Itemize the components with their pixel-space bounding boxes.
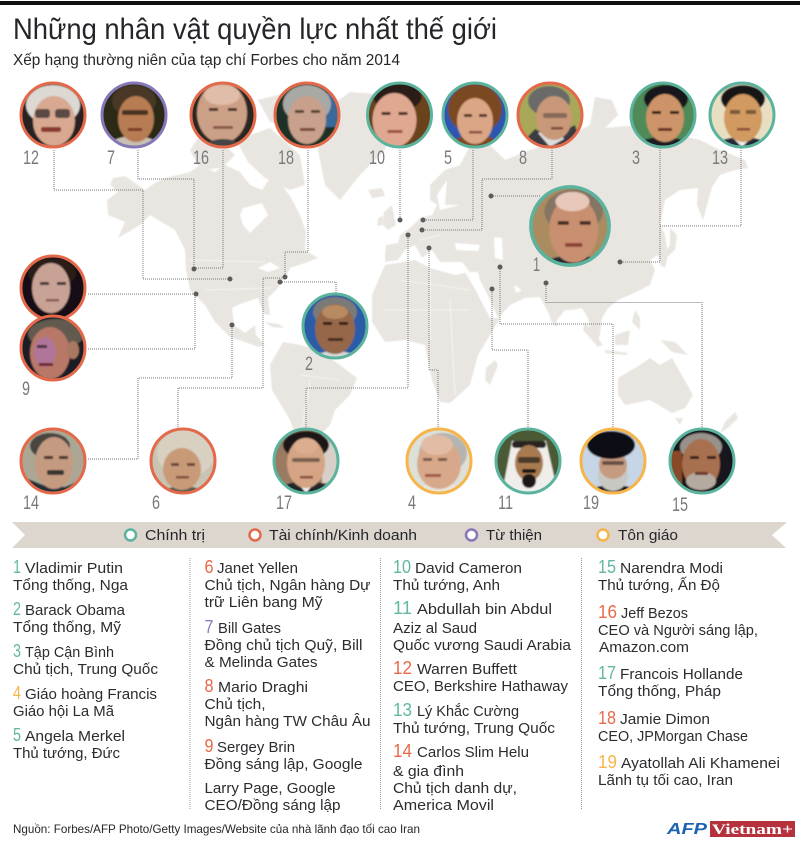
- rank numbers on map: 10: [369, 148, 385, 169]
- rank numbers on map: 5: [444, 148, 452, 169]
- list column 2: Đồng sáng lập, Google: [204, 756, 362, 773]
- list column 2: CEO/Đồng sáng lập: [204, 797, 340, 814]
- world map: [107, 92, 748, 480]
- list column 2: [204, 557, 370, 814]
- list column 3: [393, 557, 572, 814]
- list column 3: David Cameron: [415, 560, 522, 577]
- list column 3: Aziz al Saud: [393, 620, 477, 637]
- list column 1: Tổng thống, Nga: [13, 577, 129, 594]
- list column 3: Thủ tướng, Anh: [393, 577, 500, 594]
- list column 2: Đồng chủ tịch Quỹ, Bill: [204, 637, 362, 654]
- list column 4: Lãnh tụ tối cao, Iran: [598, 772, 733, 789]
- list column 3: 14: [393, 741, 412, 761]
- list column 3: Warren Buffett: [417, 661, 518, 678]
- list column 3: Quốc vương Saudi Arabia: [393, 637, 572, 654]
- portrait 9: Sergey Brin: [21, 256, 85, 320]
- list column 1: Tổng thống, Mỹ: [13, 619, 122, 636]
- portrait 12: Warren Buffett: [20, 82, 86, 148]
- list column 2: trữ Liên bang Mỹ: [204, 594, 323, 611]
- list column 3: 12: [393, 658, 412, 678]
- list column 4: Francois Hollande: [620, 666, 743, 683]
- list column 1: 4: [13, 683, 21, 703]
- list column 4: 15: [598, 557, 616, 577]
- portrait 2: Barack Obama: [303, 294, 367, 369]
- list column 2: Janet Yellen: [217, 560, 298, 577]
- list column 3: 11: [393, 598, 412, 618]
- source note: Nguồn: Forbes/AFP Photo/Getty Images/Website của nhà lãnh đạo tối cao Iran: [13, 822, 420, 836]
- portrait 7: Bill Gates: [102, 83, 166, 160]
- rank numbers on map: 13: [712, 148, 728, 169]
- list column 1: Vladimir Putin: [25, 560, 123, 577]
- portrait 19: Ali Khamenei: [581, 429, 645, 503]
- rank numbers on map: 3: [632, 148, 640, 169]
- portrait 3: Xi Jinping: [631, 83, 695, 159]
- list column 3: Thủ tướng, Trung Quốc: [393, 720, 556, 737]
- portrait 13: Li Keqiang: [710, 83, 774, 159]
- legend ribbon: Từ thiện: [486, 527, 542, 544]
- logo: AFP Vietnam+: Vietnam+: [712, 822, 793, 838]
- rank numbers on map: 12: [23, 148, 39, 169]
- list column 4: Amazon.com: [599, 639, 689, 656]
- rank numbers on map: 14: [23, 493, 39, 514]
- list column 1: 5: [13, 725, 21, 745]
- list column 1: 2: [13, 599, 21, 619]
- list column 1: Chủ tịch, Trung Quốc: [13, 661, 158, 678]
- list column 1: Giáo hoàng Francis: [25, 686, 157, 703]
- rank numbers on map: 9: [22, 379, 30, 400]
- column dividers: [190, 558, 582, 810]
- portrait 9: Larry Page: [21, 316, 85, 380]
- list column 2: 7: [204, 617, 214, 637]
- list column 1: Thủ tướng, Đức: [13, 745, 120, 762]
- list column 4: Thủ tướng, Ấn Độ: [598, 577, 720, 594]
- list column 4: Jeff Bezos: [621, 605, 688, 622]
- rank numbers on map: 18: [278, 148, 294, 169]
- rank numbers on map: 2: [305, 354, 313, 375]
- list column 4: Narendra Modi: [620, 560, 723, 577]
- list column 3: Carlos Slim Helu: [417, 744, 529, 761]
- portrait 18: Jamie Dimon: [275, 83, 339, 147]
- top bar: [0, 1, 800, 5]
- legend ribbon: Tôn giáo: [618, 527, 678, 544]
- list column 1: 1: [13, 557, 21, 577]
- portrait 17: Francois Hollande: [272, 428, 340, 494]
- rank numbers on map: 1: [533, 255, 540, 276]
- list column 1: Barack Obama: [25, 602, 126, 619]
- list column 2: Ngân hàng TW Châu Âu: [204, 713, 370, 730]
- list column 1: [13, 557, 158, 762]
- portrait 15: Narendra Modi: [670, 429, 734, 493]
- list column 2: 9: [204, 736, 214, 756]
- rank numbers on map: 7: [107, 148, 115, 169]
- list column 4: 18: [598, 708, 616, 728]
- rank numbers on map: 19: [583, 493, 599, 514]
- list column 1: Tập Cận Bình: [25, 644, 114, 661]
- rank numbers on map: 15: [672, 495, 688, 516]
- list column 2: & Melinda Gates: [204, 654, 318, 671]
- portrait 11: King Abdullah: [496, 429, 560, 493]
- list column 4: Ayatollah Ali Khamenei: [621, 755, 780, 772]
- legend ribbon: [12, 522, 787, 548]
- rank numbers on map: 4: [408, 493, 416, 514]
- list column 3: Lý Khắc Cường: [417, 703, 519, 720]
- list column 3: 13: [393, 700, 412, 720]
- portrait 1: Vladimir Putin: [531, 187, 609, 280]
- list column 2: Mario Draghi: [218, 679, 308, 696]
- list column 3: America Movil: [393, 797, 494, 814]
- list column 4: [598, 557, 780, 789]
- list column 4: Jamie Dimon: [620, 711, 710, 728]
- list column 4: 16: [598, 602, 617, 622]
- portrait 4: Pope Francis: [407, 429, 471, 503]
- list column 2: Chủ tịch,: [204, 696, 266, 713]
- list column 2: Larry Page, Google: [204, 780, 336, 797]
- legend ribbon: Tài chính/Kinh doanh: [269, 527, 417, 544]
- portrait 8: Mario Draghi: [518, 83, 582, 147]
- rank numbers on map: 8: [519, 148, 527, 169]
- list column 4: 17: [598, 663, 616, 683]
- rank numbers on map: 11: [498, 493, 513, 514]
- subtitle: Xếp hạng thường niên của tạp chí Forbes cho năm 2014: [13, 52, 400, 69]
- portrait 5: Angela Merkel: [443, 83, 507, 151]
- list column 4: CEO, JPMorgan Chase: [598, 728, 748, 745]
- portrait 6: Janet Yellen: [151, 429, 215, 502]
- connector lines: [54, 148, 741, 459]
- list column 1: Giáo hội La Mã: [13, 703, 115, 720]
- list column 2: 6: [204, 557, 214, 577]
- rank numbers on map: 17: [276, 493, 292, 514]
- rank numbers on map: 6: [152, 493, 160, 514]
- rank numbers on map: [22, 148, 728, 516]
- portrait 16: Jeff Bezos: [191, 83, 255, 155]
- portrait 10: David Cameron: [368, 83, 432, 147]
- list column 2: Bill Gates: [218, 620, 281, 637]
- list column 4: 19: [598, 752, 617, 772]
- list column 2: Chủ tịch, Ngân hàng Dự: [204, 577, 370, 594]
- list column 3: Chủ tịch danh dự,: [393, 780, 517, 797]
- logo: AFP Vietnam+: [666, 821, 795, 838]
- logo: AFP Vietnam+: AFP: [666, 821, 707, 838]
- title: Những nhân vật quyền lực nhất thế giới: [13, 13, 497, 46]
- rank numbers on map: 16: [193, 148, 209, 169]
- list column 4: Tổng thống, Pháp: [598, 683, 721, 700]
- list column 2: Sergey Brin: [217, 739, 295, 756]
- list column 3: Abdullah bin Abdul: [417, 601, 552, 618]
- list column 3: 10: [393, 557, 411, 577]
- list column 2: 8: [204, 676, 214, 696]
- list column 1: 3: [13, 641, 21, 661]
- legend ribbon: Chính trị: [145, 527, 205, 544]
- list column 3: CEO, Berkshire Hathaway: [393, 678, 568, 695]
- list column 3: & gia đình: [393, 763, 464, 780]
- list column 1: Angela Merkel: [25, 728, 125, 745]
- list column 4: CEO và Người sáng lập,: [598, 622, 758, 639]
- portrait 14: Carlos Slim: [21, 429, 85, 493]
